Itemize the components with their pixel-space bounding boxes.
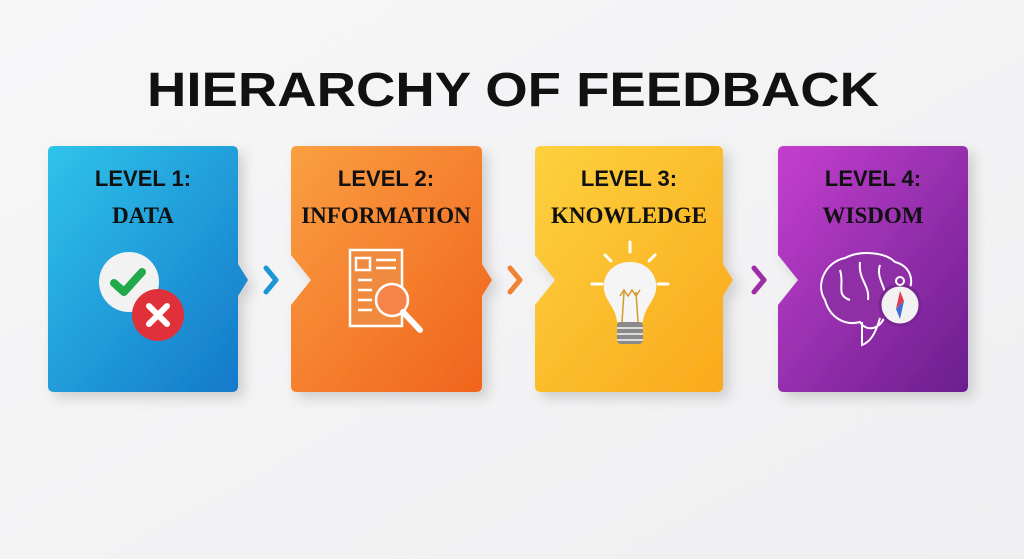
panel: level 3 knowledge: LEVEL 3: xyxy=(581,166,677,191)
panel: level 2 information xyxy=(291,146,492,392)
panel: level 3 knowledge xyxy=(535,146,733,392)
icon: brain with compass xyxy=(821,253,920,345)
title: HIERARCHY OF FEEDBACK xyxy=(147,64,879,117)
panel: level 3 knowledge: KNOWLEDGE xyxy=(551,203,707,228)
panel: level 2 information: INFORMATION xyxy=(301,203,471,228)
panel: level 4 wisdom: LEVEL 4: xyxy=(825,166,921,191)
icon: check and cross xyxy=(99,252,184,341)
arrow 1 xyxy=(266,268,276,292)
icon: light bulb xyxy=(592,242,668,344)
arrow 2 xyxy=(510,268,520,292)
panel: level 4 wisdom xyxy=(778,146,968,392)
panel: level 4 wisdom: WISDOM xyxy=(823,203,924,228)
panel: level 1 data: DATA xyxy=(112,203,174,228)
panel: level 2 information: LEVEL 2: xyxy=(338,166,434,191)
panel: level 1 data xyxy=(48,146,248,392)
icon: document with magnifier xyxy=(350,250,420,330)
panel: level 1 data: LEVEL 1: xyxy=(95,166,191,191)
arrow 3 xyxy=(754,268,764,292)
